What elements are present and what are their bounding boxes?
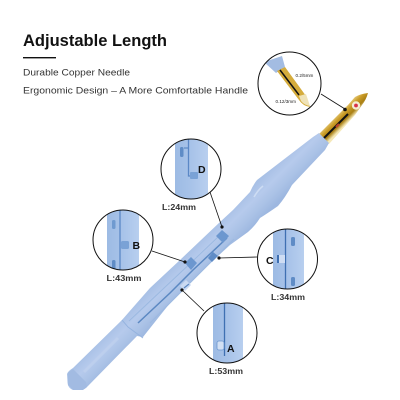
callout: D: D [198,164,206,176]
feature text: Durable Copper Needle [23,68,130,78]
title underline [23,57,56,58]
collar edge [122,320,143,338]
notch A [180,280,191,291]
callout: D [161,135,224,229]
callout: needle detail: 0.12/3mm [276,99,296,104]
callout: needle detail [258,52,347,115]
label L:24mm: L:24mm [162,202,196,212]
callout: C [217,225,318,293]
lower barrel shading [84,338,118,372]
label L:53mm: L:53mm [209,366,243,376]
label L:43mm: L:43mm [106,273,142,283]
gold needle [319,93,368,144]
grip crease highlight [254,186,263,197]
callout: C: C [266,255,274,267]
callout: B: B [132,240,140,252]
end cap [68,369,87,390]
feature text [23,68,248,96]
callout: A [180,288,257,367]
callout: needle detail: 0.2/5mm [296,73,314,78]
pen body [67,133,329,390]
notch C [208,252,218,262]
feature text: Ergonomic Design – A More Comfortable Handle [23,86,248,96]
pen illustration [67,93,368,390]
notch D [216,230,229,243]
notch B [185,257,197,270]
adjustment slot [129,236,234,323]
title: Adjustable Length [23,32,167,50]
label L:34mm: L:34mm [271,292,305,302]
callout: A: A [227,343,235,355]
callout: B [93,206,187,274]
